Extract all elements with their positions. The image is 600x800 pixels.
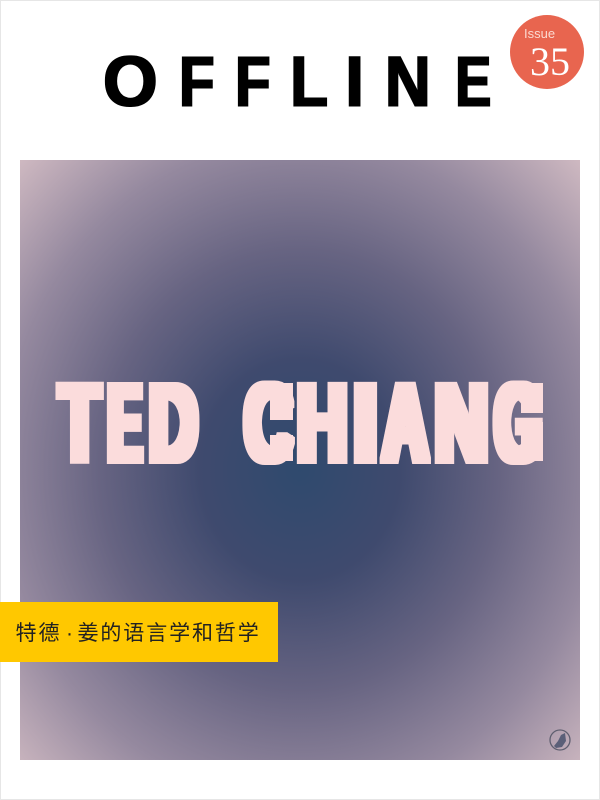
cover title: TED CHIANG: H [297,361,347,485]
icon: publisher logo [550,730,570,750]
subtitle banner: · [66,622,73,645]
masthead: OFFLINE: F [179,41,215,121]
subtitle banner: 姜的语言学和哲学 [78,622,261,645]
issue badge: Issue [524,26,555,41]
subtitle banner [0,602,278,662]
cover title: TED CHIANG: D [149,363,197,485]
cover title: TED CHIANG: G [495,361,541,485]
cover title: TED CHIANG: T [60,362,100,485]
masthead: OFFLINE: N [385,43,431,122]
masthead: OFFLINE: O [103,42,158,121]
masthead: OFFLINE: L [290,43,328,122]
masthead: OFFLINE: F [235,41,271,121]
cover title: TED CHIANG: I [352,361,378,485]
issue badge [510,15,584,89]
subtitle banner: 特德 [16,622,62,645]
cover title: TED CHIANG: E [109,363,141,486]
cover title: TED CHIANG: C [245,362,292,485]
masthead: OFFLINE: I [345,41,364,121]
issue badge: 35 [530,39,570,84]
masthead: OFFLINE: E [455,43,491,122]
cover title: TED CHIANG: N [435,361,488,484]
cover title: TED CHIANG: A [383,361,428,484]
masthead: OFFLINE [103,41,491,122]
cover panel with radial gradient [20,160,580,760]
cover title: TED CHIANG [60,361,541,486]
